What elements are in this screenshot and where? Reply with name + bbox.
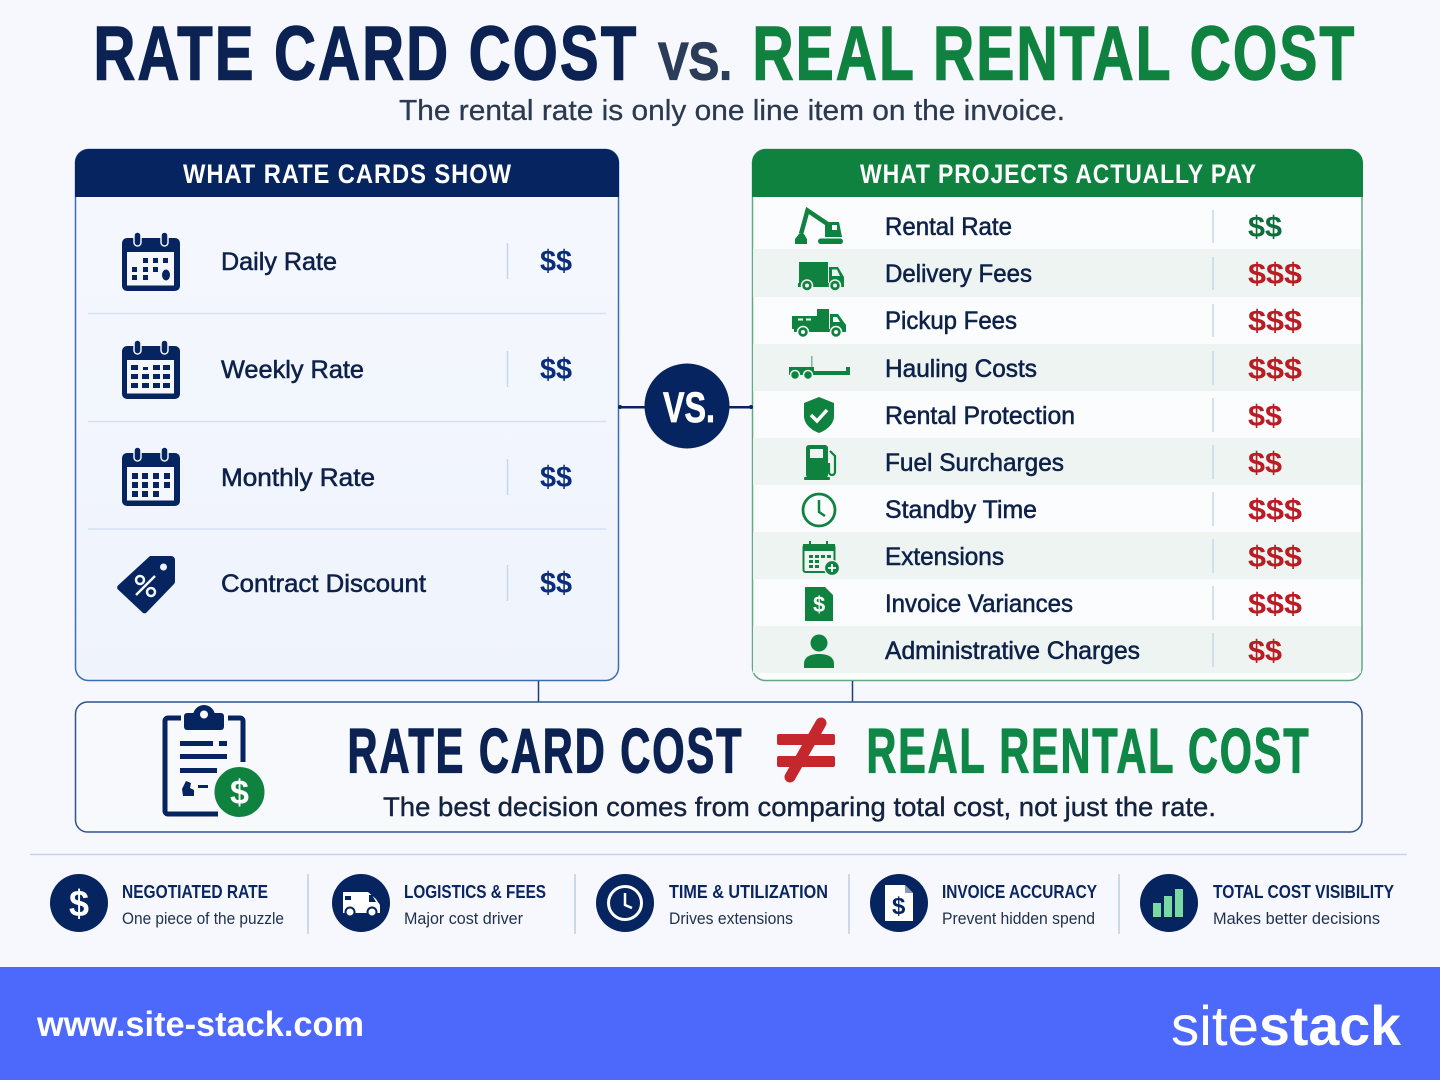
- icon: excavator: [795, 210, 843, 244]
- icon: dollar badge: $: [69, 883, 89, 924]
- footer band: www.site-stack.com: [36, 1005, 364, 1044]
- row: invoice variances: $$$: [1248, 588, 1302, 621]
- subtitle: The rental rate is only one line item on the invoice.: [399, 95, 1065, 127]
- row: rental protection: Rental Protection: [885, 402, 1075, 430]
- row: monthly rate: Monthly Rate: [221, 464, 375, 492]
- row: weekly rate: [122, 340, 572, 399]
- row: fuel surcharges: Fuel Surcharges: [885, 449, 1064, 477]
- panel header: rate cards: WHAT RATE CARDS SHOW: [183, 159, 512, 189]
- icon: daily calendar: [122, 232, 180, 291]
- icon: calendar plus: [803, 541, 840, 576]
- row: fuel surcharges: [804, 445, 1282, 480]
- icon: dollar badge: [50, 874, 108, 932]
- item: logistics and fees: LOGISTICS & FEES: [404, 882, 546, 902]
- row: rental rate: $$: [1248, 211, 1282, 244]
- icon: invoice dollar: $: [813, 592, 825, 617]
- item: total cost visibility: [1140, 874, 1394, 932]
- title: RATE CARD COST: [94, 12, 638, 96]
- callout: RATE CARD COST: [348, 716, 744, 786]
- item: logistics and fees: Major cost driver: [404, 909, 523, 928]
- panel header: projects: WHAT PROJECTS ACTUALLY PAY: [860, 159, 1257, 189]
- row: delivery fees: Delivery Fees: [885, 260, 1032, 288]
- item: time and utilization: [596, 874, 828, 932]
- row: standby time: [803, 492, 1302, 527]
- row: extensions: [803, 539, 1302, 576]
- item: negotiated rate: NEGOTIATED RATE: [122, 882, 268, 902]
- callout: [76, 702, 1362, 832]
- row: administrative charges: [804, 633, 1282, 668]
- row: pickup fees: [792, 304, 1302, 338]
- item: invoice accuracy: [870, 874, 1097, 932]
- icon: discount tag: [117, 556, 175, 613]
- row: pickup fees: Pickup Fees: [885, 307, 1017, 335]
- panel: what projects actually pay: [752, 149, 1363, 680]
- row: weekly rate: Weekly Rate: [221, 356, 364, 384]
- title: VS.: [658, 32, 732, 92]
- row: hauling costs: Hauling Costs: [885, 355, 1037, 383]
- icon: pickup truck: [792, 309, 846, 338]
- icon: weekly calendar: [122, 340, 180, 399]
- row: contract discount: Contract Discount: [221, 570, 426, 598]
- footer band: [0, 967, 1440, 1080]
- icon: clipboard with dollar: $: [230, 774, 249, 812]
- row: administrative charges: $$: [1248, 635, 1282, 668]
- logo: sitestack: site: [1171, 994, 1259, 1057]
- row: standby time: Standby Time: [885, 496, 1037, 524]
- icon: monthly calendar: [122, 447, 180, 506]
- item: logistics and fees: [332, 874, 546, 932]
- row: contract discount: $$: [540, 567, 572, 600]
- icon: invoice badge: $: [892, 893, 906, 920]
- icon: invoice dollar: [805, 587, 833, 621]
- icon: bar chart badge: [1140, 874, 1198, 932]
- icon: shield: [804, 397, 834, 433]
- logo: sitestack: [1171, 994, 1402, 1057]
- row: contract discount: [117, 556, 572, 613]
- icon: van badge: [332, 874, 390, 932]
- panel header: projects: [752, 149, 1363, 197]
- row: daily rate: $$: [540, 245, 572, 278]
- row: invoice variances: [805, 586, 1302, 621]
- row: extensions: $$$: [1248, 541, 1302, 574]
- icon: flatbed trailer: [789, 356, 850, 380]
- row: rental protection: [804, 397, 1282, 433]
- row: administrative charges: Administrative Charges: [885, 637, 1140, 665]
- item: invoice accuracy: Prevent hidden spend: [942, 909, 1095, 928]
- item: negotiated rate: One piece of the puzzle: [122, 909, 284, 928]
- icon: person: [804, 634, 834, 668]
- panel header: rate cards: [75, 149, 619, 197]
- icon: clock badge: [596, 874, 654, 932]
- title: [94, 12, 1356, 96]
- row: rental protection: $$: [1248, 400, 1282, 433]
- row: rental rate: Rental Rate: [885, 213, 1012, 241]
- item: invoice accuracy: INVOICE ACCURACY: [942, 882, 1097, 902]
- icon: clipboard with dollar: [165, 705, 266, 818]
- vs badge: [644, 364, 730, 448]
- logo: sitestack: stack: [1259, 994, 1402, 1057]
- row: extensions: Extensions: [885, 543, 1004, 571]
- icon: fuel pump: [804, 445, 835, 480]
- icon: delivery truck: [798, 262, 844, 291]
- row: fuel surcharges: $$: [1248, 447, 1282, 480]
- row: invoice variances: Invoice Variances: [885, 590, 1073, 618]
- icon: clock: [803, 494, 835, 526]
- row: rental rate: [795, 210, 1282, 244]
- item: total cost visibility: Makes better decisions: [1213, 909, 1380, 928]
- panel: what rate cards show: [75, 149, 619, 680]
- icon: not equal sign: [777, 723, 835, 777]
- callout: The best decision comes from comparing total cost, not just the rate.: [383, 792, 1216, 822]
- row: pickup fees: $$$: [1248, 305, 1302, 338]
- vs badge: VS.: [663, 384, 715, 432]
- row: weekly rate: $$: [540, 353, 572, 386]
- row: daily rate: [122, 232, 572, 291]
- connector: vs lines: [618, 405, 753, 409]
- item: total cost visibility: TOTAL COST VISIBILITY: [1213, 882, 1394, 902]
- item: time and utilization: Drives extensions: [669, 909, 793, 928]
- row: monthly rate: [122, 447, 572, 506]
- bottom strip: [50, 874, 1394, 934]
- item: time and utilization: TIME & UTILIZATION: [669, 882, 828, 902]
- item: negotiated rate: [50, 874, 284, 932]
- row: monthly rate: $$: [540, 461, 572, 494]
- row: standby time: $$$: [1248, 494, 1302, 527]
- connector: panels to callout: [538, 681, 852, 702]
- row: delivery fees: [798, 257, 1302, 291]
- icon: invoice badge: [870, 874, 928, 932]
- row: hauling costs: $$$: [1248, 353, 1302, 386]
- row: hauling costs: [789, 351, 1302, 386]
- row: daily rate: Daily Rate: [221, 248, 337, 276]
- row: delivery fees: $$$: [1248, 258, 1302, 291]
